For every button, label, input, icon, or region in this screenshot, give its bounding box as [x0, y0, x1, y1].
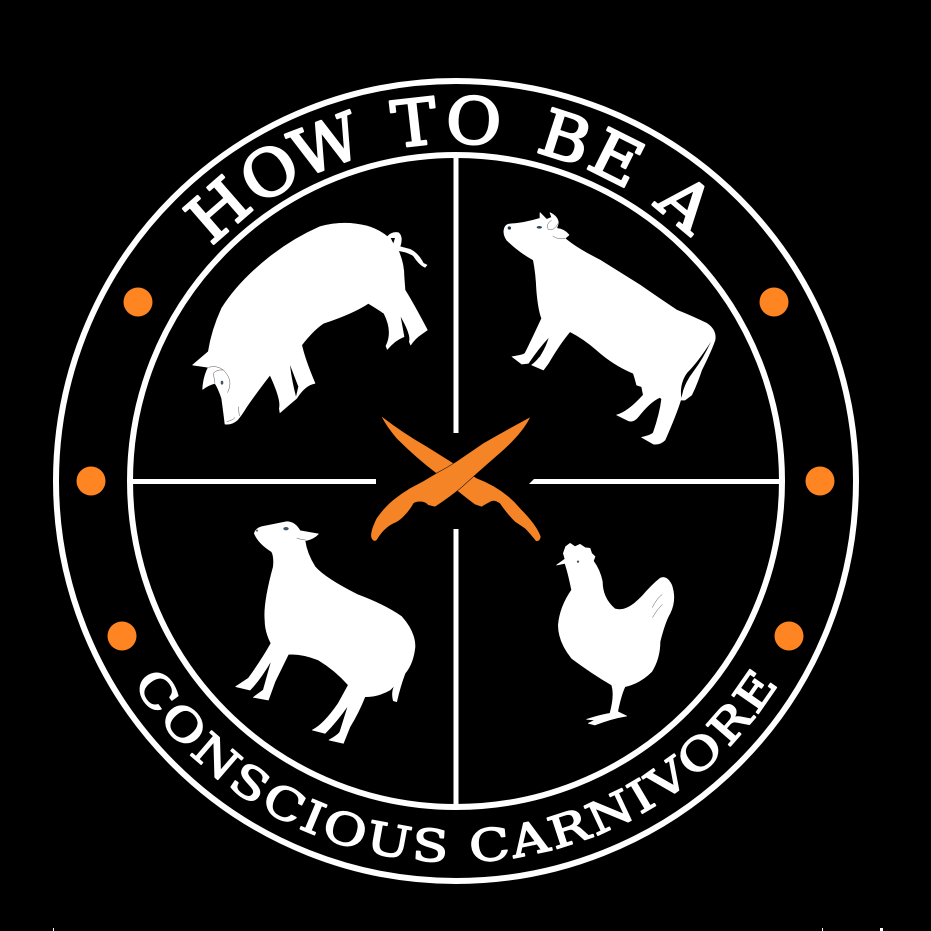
quadrant cross lines	[131, 156, 782, 806]
heading: conscious carnivore: CONSCIOUS CARNIVORE	[140, 668, 778, 862]
icon: sheep	[236, 522, 415, 743]
knife pointing upper right	[371, 417, 530, 541]
icon: pig	[193, 223, 427, 424]
heading: how to be a: HOW TO BE A	[182, 94, 704, 245]
icon: cow	[504, 213, 715, 444]
orange ring dots	[76, 288, 834, 650]
outer ring	[56, 81, 856, 881]
knife pointing upper left	[382, 417, 541, 541]
icon: crossed knives	[371, 417, 541, 541]
badge emblem	[53, 78, 859, 884]
bottom edge marks	[53, 928, 883, 931]
inner ring	[130, 155, 782, 807]
icon: hen	[557, 543, 674, 725]
